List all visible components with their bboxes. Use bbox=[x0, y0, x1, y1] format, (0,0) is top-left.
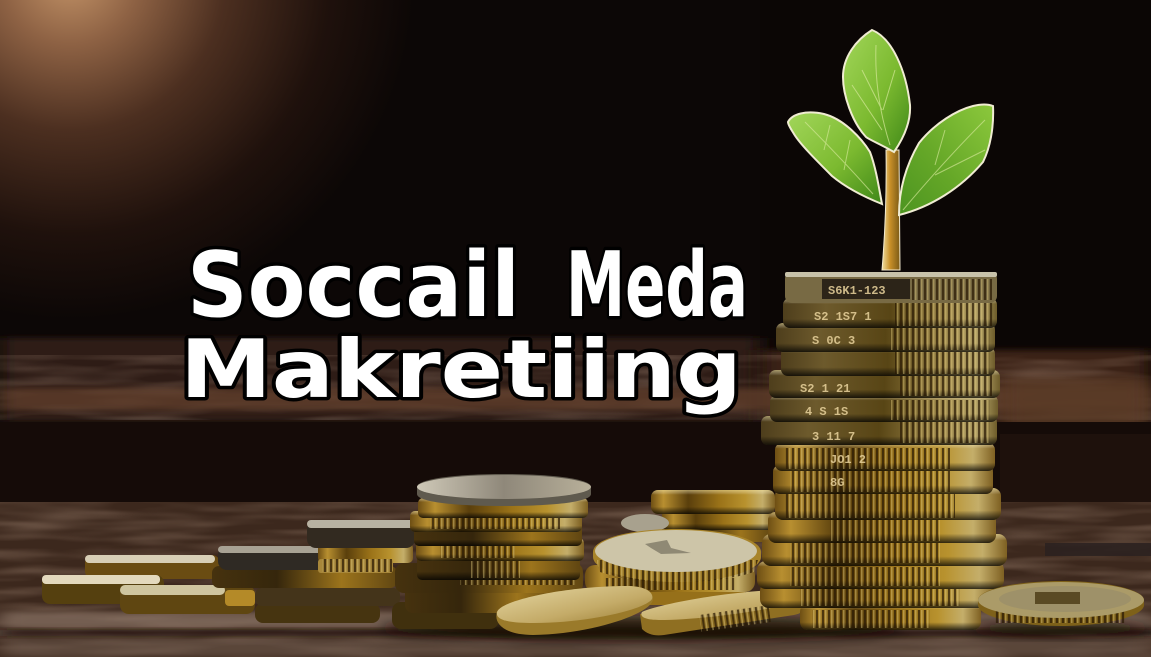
coins: tall main stack: S2 1S7 1 bbox=[814, 310, 872, 324]
coins: small left pile bbox=[212, 520, 415, 623]
icon: green sprout bbox=[788, 30, 993, 270]
coins: centre stack bbox=[392, 474, 591, 629]
coins: tall main stack bbox=[757, 272, 1007, 630]
coins: tall main stack: S2 1 21 bbox=[800, 382, 850, 396]
coin: large silver coin in front bbox=[585, 529, 761, 605]
coins: tall main stack: JO1 2 bbox=[830, 453, 866, 467]
title line 2: Makretiing bbox=[180, 323, 742, 416]
coins: front tilted pale coins bbox=[496, 586, 806, 635]
background: rear wooden plank bbox=[0, 338, 1151, 502]
leaf: left bbox=[788, 112, 882, 204]
title line 1 bbox=[187, 233, 748, 338]
coins: back pile right of centre bbox=[621, 490, 775, 542]
title line 1: Meda bbox=[566, 233, 748, 338]
coins: tall main stack: 3 11 7 bbox=[812, 430, 855, 444]
coins: tall main stack: S6K1-123 bbox=[828, 284, 886, 298]
stem bbox=[882, 150, 900, 270]
coins: flat coins at far left bbox=[42, 555, 255, 614]
coins: tall main stack: 4 S 1S bbox=[805, 405, 848, 419]
leaf: right bbox=[899, 104, 993, 215]
leaf: top bbox=[843, 30, 910, 152]
title bbox=[180, 233, 748, 416]
background: wooden table top bbox=[0, 502, 1151, 657]
title line 1: Soccail bbox=[187, 233, 520, 338]
coins: tall main stack: S 0C 3 bbox=[812, 334, 855, 348]
coin: right flat coin bbox=[978, 581, 1144, 626]
coins: tall main stack: 8G bbox=[830, 476, 844, 490]
